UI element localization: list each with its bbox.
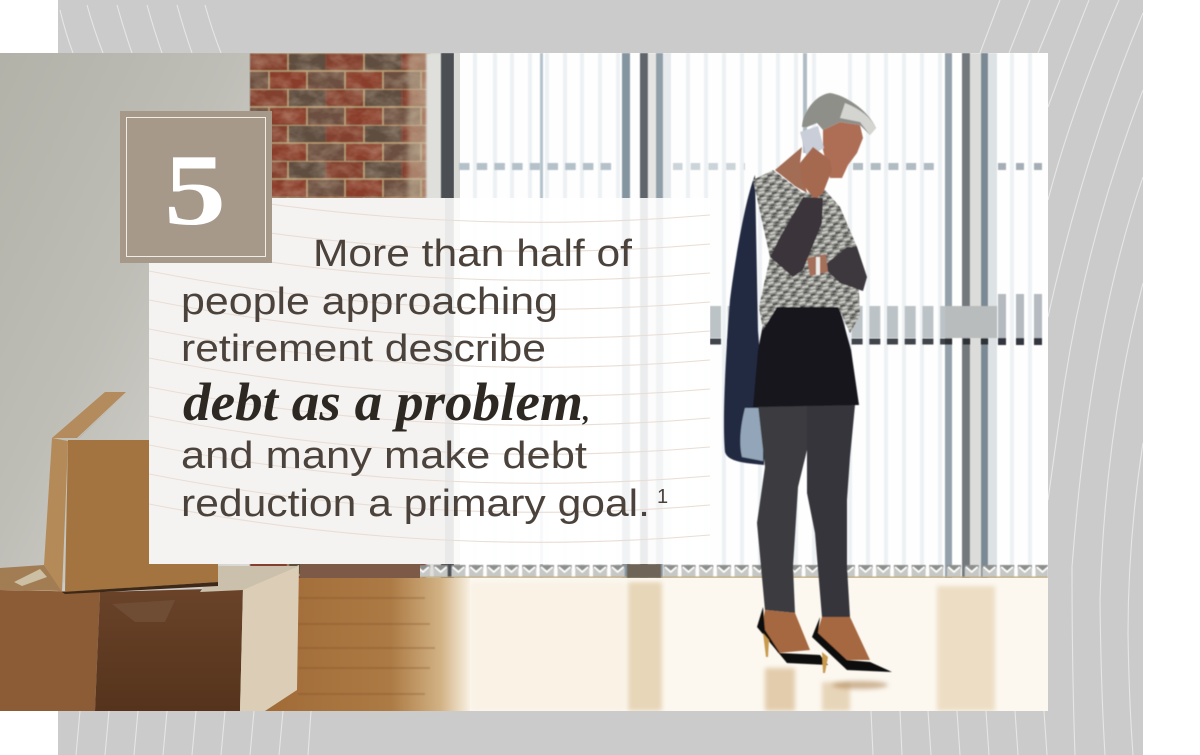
emphasis: debt as a problem: debt as a problem , xyxy=(183,372,590,432)
window frames xyxy=(540,53,997,578)
wall xyxy=(0,53,260,583)
upper box xyxy=(65,440,218,592)
lower right box xyxy=(95,588,243,711)
horizontal window bars xyxy=(459,166,1042,342)
heading text block xyxy=(181,233,668,525)
blind weights along the sill xyxy=(415,564,1048,578)
hair xyxy=(802,93,876,135)
shawl xyxy=(724,175,764,465)
line: and many make debt: and many make debt xyxy=(181,435,587,477)
woman xyxy=(724,93,892,673)
lower left box xyxy=(0,590,100,711)
wood planks on the left xyxy=(260,578,470,711)
hand on phone xyxy=(800,147,832,200)
wrist with bracelets xyxy=(807,254,828,276)
face xyxy=(823,122,863,178)
other sleeve xyxy=(823,247,867,291)
line: people approaching: people approaching xyxy=(181,281,558,323)
line: reduction a primary goal: reduction a primary goal. xyxy=(181,483,650,525)
knit top xyxy=(753,170,860,333)
sheer shawl hem xyxy=(740,408,763,461)
skirt xyxy=(753,303,859,407)
number badge xyxy=(120,111,272,263)
brick column xyxy=(250,53,460,583)
forearm sleeve xyxy=(770,197,823,277)
panel contour lines xyxy=(149,184,710,542)
photo: woman on phone in an empty room xyxy=(0,53,1048,711)
left foot xyxy=(762,610,810,653)
floor plank streaks xyxy=(298,598,435,694)
neck and chest xyxy=(775,147,807,193)
cardboard boxes xyxy=(0,392,299,711)
wooden floor xyxy=(470,578,1048,711)
line: retirement describe: retirement describe xyxy=(181,328,546,370)
window with vertical blinds xyxy=(300,53,1048,578)
footnote marker: 1 xyxy=(657,486,668,508)
right foot xyxy=(817,617,870,660)
phone xyxy=(800,126,824,158)
number 5: 5 xyxy=(164,134,226,247)
line: More than half of: More than half of xyxy=(313,233,632,275)
right legging xyxy=(807,405,855,617)
translucent text panel xyxy=(149,184,710,564)
left legging xyxy=(757,405,807,613)
floor reflections xyxy=(470,582,995,711)
blind slats xyxy=(475,53,1030,578)
